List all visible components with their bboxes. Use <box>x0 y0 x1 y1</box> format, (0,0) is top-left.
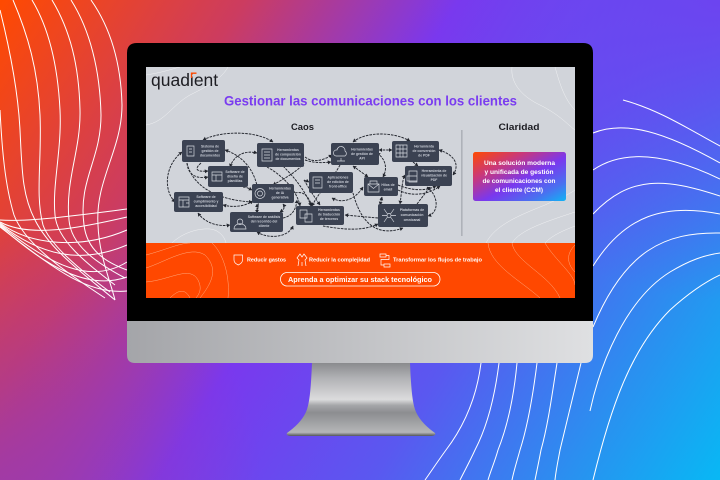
node: Hilos de email: email <box>384 188 392 192</box>
slide background <box>146 67 575 243</box>
benefit: Reducir la complejidad: Reducir la complejidad <box>309 258 371 264</box>
icon: template <box>212 172 222 181</box>
benefit: Reducir gastos <box>234 255 286 265</box>
monitor bezel <box>127 43 593 321</box>
node: Software de cumplimiento y accesibilidad: Software de <box>196 195 216 199</box>
icon: omnichannel hub <box>382 209 396 222</box>
icon: conversion grid <box>396 145 407 157</box>
node: Software de diseño de plantillas: plantillas <box>228 179 242 183</box>
node: Software de análisis del recorrido del cliente <box>230 212 283 232</box>
icon: front-office <box>313 177 322 188</box>
monitor chin <box>127 320 593 363</box>
icon: customer <box>234 219 246 229</box>
node: Herramientas de traducción de terceros: de traducción <box>318 212 340 216</box>
node: Software de diseño de plantillas <box>208 166 248 187</box>
benefit: Transformar los flujos de trabajo <box>380 254 483 267</box>
node: Software de análisis del recorrido del cliente: cliente <box>259 224 269 228</box>
node: Hilos de email: Hilos de <box>381 183 395 187</box>
node: Aplicaciones de edición de front-office: front-office <box>329 184 347 188</box>
heading: Caos: Caos <box>291 122 314 133</box>
node: Herramienta de visualización de PDF: PDF <box>431 178 437 182</box>
node: Herramientas de traducción de terceros: de terceros <box>320 217 338 221</box>
decorative white waves: right <box>425 100 720 480</box>
icon: composition <box>262 149 272 161</box>
slide contour lines <box>146 67 575 243</box>
callout: CCM solution: de comunicaciones con <box>482 178 556 185</box>
node: Sistema de gestión de documentos: documentos <box>200 154 220 158</box>
node: Herramientas de IA generativa: de IA <box>276 191 285 195</box>
node: Herramienta de visualización de PDF <box>405 166 452 186</box>
node: Hilos de email <box>364 177 398 196</box>
node: Herramienta de visualización de PDF: visualización de <box>421 174 447 178</box>
node: Plataformas de comunicación omnicanal: omnicanal <box>404 218 420 222</box>
icon: translation <box>300 210 312 222</box>
node: Herramientas de traducción de terceros: Herramientas <box>318 208 340 212</box>
node: Software de análisis del recorrido del cliente: del recorrido del <box>251 220 277 224</box>
node: Software de diseño de plantillas: Software de <box>225 170 245 174</box>
node: Herramienta de visualización de PDF: Herramienta de <box>422 169 446 173</box>
benefit: Reducir la complejidad <box>297 254 371 266</box>
icon: envelope <box>368 181 379 192</box>
benefit: Transformar los flujos de trabajo: Transformar los flujos de trabajo <box>393 258 483 264</box>
logo: quadient <box>151 70 218 90</box>
heading: Claridad: Claridad <box>498 122 540 133</box>
decorative white waves: left <box>0 0 127 300</box>
node: Plataformas de comunicación omnicanal: Plataformas de <box>400 208 424 212</box>
callout: CCM solution <box>473 152 566 201</box>
node: Plataformas de comunicación omnicanal <box>378 204 428 227</box>
node: Herramienta de conversión de PDF: Herramienta <box>414 144 434 148</box>
node: Herramientas de gestión de API <box>331 143 379 165</box>
screen slide <box>146 67 575 298</box>
node: Herramientas de gestión de API: Herramientas <box>351 148 373 152</box>
node: Sistema de gestión de documentos: gestión de <box>202 149 219 153</box>
icon: people <box>297 254 307 266</box>
benefit: Reducir gastos: Reducir gastos <box>247 258 286 264</box>
callout: CCM solution: Una solución moderna <box>484 160 555 167</box>
icon: pdf viewer <box>407 171 417 182</box>
callout: CCM solution: el cliente (CCM) <box>495 187 543 194</box>
icon: shield <box>234 255 242 265</box>
callout: CCM solution: y unificada de gestión <box>484 169 554 176</box>
icon: document <box>187 146 194 156</box>
title: Gestionar las comunicaciones con los clientes <box>224 94 517 108</box>
node: Aplicaciones de edición de front-office <box>309 172 353 193</box>
node: Software de diseño de plantillas: diseño de <box>227 174 243 178</box>
node: Herramienta de conversión de PDF <box>392 141 439 162</box>
node: Software de cumplimiento y accesibilidad <box>174 192 223 212</box>
node: Sistema de gestión de documentos <box>182 140 225 162</box>
node: Herramientas de composición de documentos <box>257 143 304 167</box>
node: Plataformas de comunicación omnicanal: comunicación <box>401 213 423 217</box>
dashed chaos arrows <box>167 133 456 236</box>
node: Herramientas de gestión de API: de gestión de <box>351 152 373 156</box>
node: Aplicaciones de edición de front-office: Aplicaciones <box>328 176 349 180</box>
node: Software de cumplimiento y accesibilidad: accesibilidad <box>195 204 217 208</box>
band contour lines <box>146 243 575 298</box>
node: Herramienta de conversión de PDF: de PDF <box>418 154 430 158</box>
node: Herramienta de conversión de PDF: de conversión <box>412 149 436 153</box>
node: Herramientas de gestión de API: API <box>359 156 365 160</box>
monitor stand <box>287 363 435 436</box>
node: Herramientas de IA generativa <box>252 184 294 203</box>
node: Herramientas de composición de documentos: Herramientas <box>277 148 299 152</box>
node: Sistema de gestión de documentos: Sistema de <box>201 144 219 148</box>
button: call to action: Aprenda a optimizar su stack tecnológico <box>288 275 432 284</box>
node: Herramientas de IA generativa: Herramientas <box>269 186 291 190</box>
node: Herramientas de composición de documentos: de documentos <box>275 157 301 161</box>
node: Aplicaciones de edición de front-office: de edición de <box>327 180 349 184</box>
icon: compliance <box>179 197 189 207</box>
divider <box>460 130 463 236</box>
icon: AI gear <box>255 188 265 198</box>
orange band <box>146 243 575 298</box>
node: Software de análisis del recorrido del cliente: Software de análisis <box>248 215 280 219</box>
node: Herramientas de composición de documentos: de composición <box>275 152 301 156</box>
node: Software de cumplimiento y accesibilidad: cumplimiento y <box>194 200 219 204</box>
icon: workflow <box>380 254 390 267</box>
node: Herramientas de IA generativa: generativa <box>272 196 289 200</box>
node: Herramientas de traducción de terceros <box>296 206 344 225</box>
icon: cloud gear <box>333 146 346 161</box>
button: call to action <box>280 272 440 286</box>
